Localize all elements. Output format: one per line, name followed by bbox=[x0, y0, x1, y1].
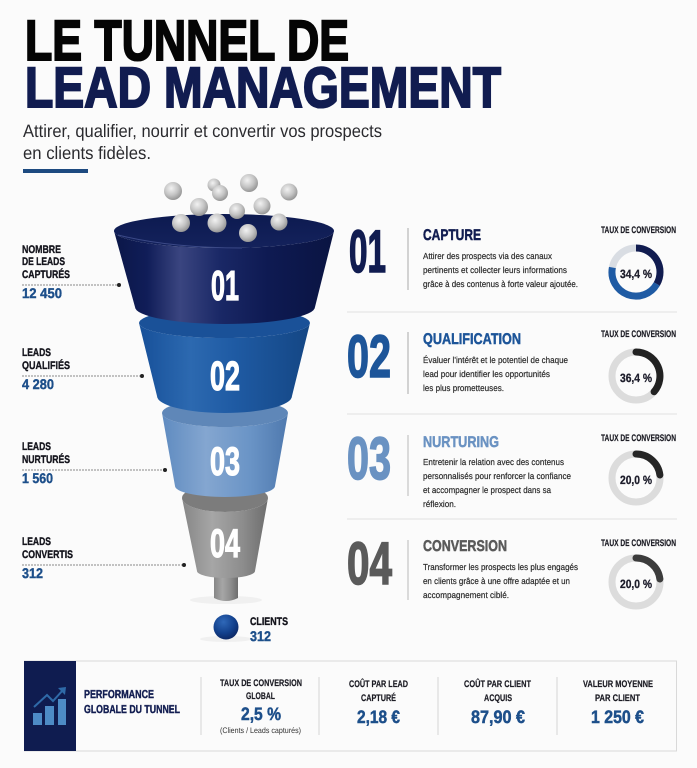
label: captured leads: CAPTURÉS bbox=[22, 268, 70, 281]
step 01: capture: grâce à des contenus à forte valeur ajoutée. bbox=[423, 279, 578, 289]
step 03: nurturing bbox=[347, 425, 676, 509]
metric: global conversion bbox=[220, 678, 302, 735]
metric: cost per client: 87,90 € bbox=[471, 707, 525, 727]
funnel spout bbox=[190, 574, 262, 604]
step 04: conversion: 04 bbox=[347, 530, 392, 597]
title: LEAD MANAGEMENT bbox=[25, 56, 501, 120]
funnel stage 03 bbox=[162, 399, 288, 497]
label: converted leads: 312 bbox=[22, 565, 43, 581]
title: LE TUNNEL DE bbox=[25, 9, 349, 73]
step 04: conversion: en clients grâce à une offre adaptée et un bbox=[423, 576, 570, 586]
metric: global conversion: GLOBAL bbox=[246, 691, 275, 702]
label: captured leads bbox=[22, 244, 121, 301]
step 01: capture bbox=[349, 218, 676, 296]
panel heading: PERFORMANCE bbox=[84, 689, 154, 701]
step 01: capture: pertinents et collecter leurs informations bbox=[423, 265, 568, 275]
panel heading: GLOBALE DU TUNNEL bbox=[84, 704, 180, 716]
metric: cost per lead bbox=[349, 678, 408, 727]
metric: cost per lead: 2,18 € bbox=[357, 707, 400, 727]
metric: cost per client: COÛT PAR CLIENT bbox=[464, 678, 531, 690]
funnel stage 02: 02 bbox=[210, 353, 240, 399]
label: converted leads bbox=[22, 536, 186, 581]
label: clients: CLIENTS bbox=[250, 616, 288, 628]
metric: cost per client: ACQUIS bbox=[484, 693, 512, 704]
label: converted leads: CONVERTIS bbox=[22, 549, 73, 561]
donut 34,4 %: 34,4 % bbox=[620, 267, 652, 281]
donut 36,4 % bbox=[612, 352, 660, 400]
step 02: qualification: 02 bbox=[347, 323, 391, 390]
label: qualified leads: LEADS bbox=[22, 347, 51, 359]
funnel stage 04 bbox=[182, 484, 268, 578]
metric: global conversion: TAUX DE CONVERSION bbox=[220, 678, 302, 689]
subtitle bbox=[23, 121, 382, 163]
step 02: qualification: Évaluer l’intérêt et le potentiel de chaque bbox=[423, 355, 568, 365]
client ball bbox=[200, 614, 252, 642]
label: qualified leads: QUALIFIÉS bbox=[22, 359, 70, 372]
step 03: nurturing: Entretenir la relation avec des contenus bbox=[423, 457, 565, 467]
step 01: capture: Attirer des prospects via des canaux bbox=[423, 251, 553, 261]
performance panel bbox=[24, 661, 676, 751]
metric: global conversion: 2,5 % bbox=[241, 704, 281, 724]
step 02: qualification: lead pour identifier les opportunités bbox=[423, 369, 551, 379]
step 02: qualification bbox=[347, 323, 676, 400]
subtitle: en clients fidèles. bbox=[23, 143, 151, 163]
funnel stage 03: 03 bbox=[210, 440, 240, 484]
label: clients bbox=[250, 616, 288, 644]
metric: average client value: VALEUR MOYENNE bbox=[583, 679, 653, 690]
label: nurtured leads bbox=[22, 441, 167, 486]
step 04: conversion: CONVERSION bbox=[423, 538, 507, 555]
label: qualified leads bbox=[22, 347, 144, 392]
lead balls bbox=[164, 174, 298, 242]
step 04: conversion bbox=[347, 530, 676, 606]
label: nurtured leads: 1 560 bbox=[22, 470, 53, 486]
subtitle: Attirer, qualifier, nourrir et convertir vos prospects bbox=[23, 121, 382, 141]
step 01: capture: CAPTURE bbox=[423, 227, 481, 244]
label: captured leads: 12 450 bbox=[22, 285, 62, 301]
step 02: qualification: QUALIFICATION bbox=[423, 331, 521, 348]
label: clients: 312 bbox=[250, 628, 271, 644]
label: nurtured leads: LEADS bbox=[22, 441, 51, 453]
funnel bbox=[114, 174, 334, 642]
metric: cost per lead: COÛT PAR LEAD bbox=[349, 678, 408, 690]
step 03: nurturing: personnalisés pour renforcer la confiance bbox=[423, 471, 571, 481]
metric: average client value: 1 250 € bbox=[591, 707, 644, 727]
funnel stage 02 bbox=[139, 308, 310, 413]
label: captured leads: DE LEADS bbox=[22, 256, 65, 268]
step 04: conversion: accompagnement ciblé. bbox=[423, 590, 509, 600]
step 02: qualification: les plus prometteuses. bbox=[423, 383, 504, 393]
metric: global conversion: (Clients / Leads capturés) bbox=[220, 726, 301, 735]
funnel stage 04: 04 bbox=[210, 522, 241, 566]
metric: cost per client bbox=[464, 678, 531, 727]
metric: average client value: PAR CLIENT bbox=[595, 693, 640, 704]
label: captured leads: NOMBRE bbox=[22, 244, 61, 256]
donut 20,0 % bbox=[612, 454, 660, 502]
funnel stage 01 bbox=[114, 214, 334, 324]
title bbox=[25, 9, 501, 120]
step 03: nurturing: 03 bbox=[347, 425, 391, 492]
panel icon: growth chart bbox=[24, 661, 76, 751]
metric: average client value bbox=[583, 679, 653, 727]
funnel stage 01: 01 bbox=[211, 262, 239, 309]
step 04: conversion: Transformer les prospects les plus engagés bbox=[423, 562, 579, 572]
donut 20,0 %: 20,0 % bbox=[620, 577, 652, 591]
step 03: nurturing: NURTURING bbox=[423, 434, 499, 451]
donut 36,4 %: 36,4 % bbox=[620, 371, 652, 385]
panel heading bbox=[84, 689, 180, 716]
step 03: nurturing: réflexion. bbox=[423, 499, 456, 509]
donut 34,4 % bbox=[612, 248, 660, 296]
label: converted leads: LEADS bbox=[22, 536, 51, 548]
donut 20,0 %: 20,0 % bbox=[620, 473, 652, 487]
label: qualified leads: 4 280 bbox=[22, 376, 54, 392]
donut 20,0 % bbox=[612, 558, 660, 606]
step 03: nurturing: et accompagner le prospect dans sa bbox=[423, 485, 551, 495]
label: nurtured leads: NURTURÉS bbox=[22, 453, 70, 466]
title rule bbox=[23, 169, 88, 173]
metric: cost per lead: CAPTURÉ bbox=[361, 692, 396, 704]
step 01: capture: 01 bbox=[349, 218, 386, 285]
